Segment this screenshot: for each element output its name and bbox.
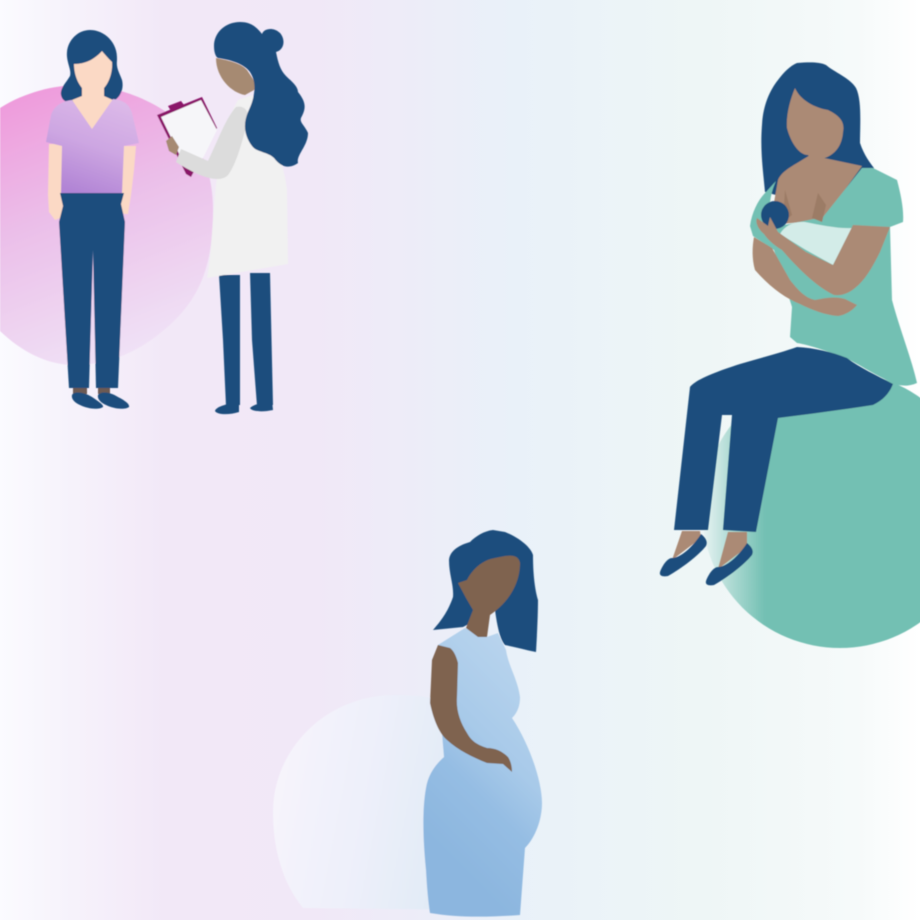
face [216,58,255,95]
torso skin [770,155,862,225]
figure: patient in purple shirt [46,30,139,409]
trousers [59,193,125,388]
mother's right arm [756,217,890,295]
clipboard board [157,97,217,177]
hair [214,22,308,167]
face [787,88,843,160]
lower body of mother [660,347,893,585]
clipboard paper [161,100,217,168]
trousers [674,347,893,532]
coat [207,95,288,278]
hand [166,136,179,155]
figure: doctor in white coat [157,22,308,414]
neck and chest [72,88,113,130]
arm [430,645,512,772]
chest shading [783,190,826,222]
baby head [761,201,789,229]
pale ball [273,695,480,910]
legs [219,273,273,406]
skin ankles [672,531,747,569]
left arm [48,144,65,220]
hair [61,30,123,102]
figure: pregnant woman [423,530,542,917]
teal ball [702,372,920,648]
face and neck [458,556,520,637]
hair [761,62,874,210]
sleeve [176,107,248,179]
mother's left arm [753,237,857,316]
feet [215,401,273,414]
dress [423,628,542,917]
face [74,51,112,95]
shoes [660,534,753,585]
ankles [73,386,110,394]
hair [433,530,538,652]
clipboard [157,97,217,177]
shoes [72,393,129,409]
baby blanket [780,222,852,265]
shirt [46,99,139,193]
figure: mother breastfeeding on ball [750,62,917,386]
right arm [119,146,136,214]
shirt [750,168,917,386]
pink circle backdrop [0,85,213,365]
